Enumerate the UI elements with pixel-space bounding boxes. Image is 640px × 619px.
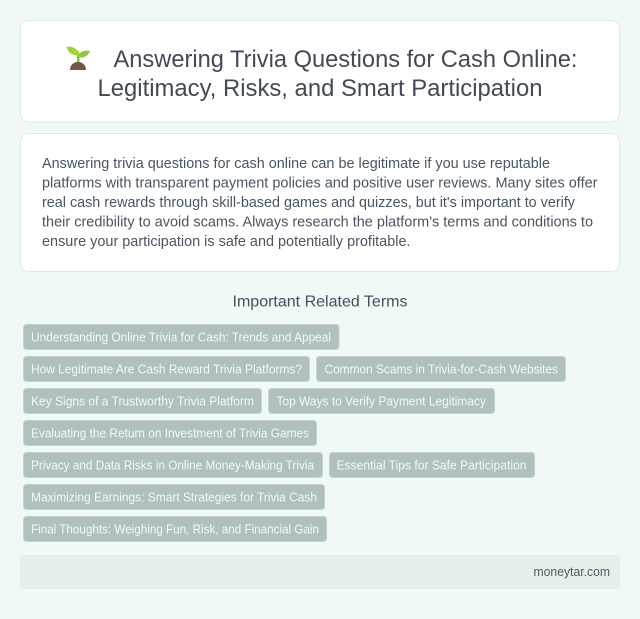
panel: introduction bbox=[20, 134, 620, 272]
tag: Privacy and Data Risks in Online Money-Making Trivia bbox=[31, 458, 315, 472]
tag bbox=[24, 484, 324, 510]
footer bbox=[20, 555, 620, 589]
tag bbox=[316, 356, 566, 382]
intro paragraph: ensure your participation is safe and potentially profitable. bbox=[42, 234, 410, 250]
title: Legitimacy, Risks, and Smart Participation bbox=[98, 75, 542, 102]
tag bbox=[24, 356, 310, 382]
intro paragraph bbox=[42, 156, 598, 250]
panel: related term tags bbox=[24, 324, 566, 542]
tag bbox=[24, 324, 339, 350]
tag bbox=[330, 452, 534, 478]
title: Answering Trivia Questions for Cash Online: bbox=[114, 46, 578, 73]
tag: How Legitimate Are Cash Reward Trivia Platforms? bbox=[31, 362, 302, 376]
tag bbox=[24, 420, 316, 446]
title bbox=[98, 46, 578, 102]
tag bbox=[268, 388, 494, 414]
tag: Final Thoughts: Weighing Fun, Risk, and Financial Gain bbox=[31, 522, 319, 536]
footer site name: moneytar.com bbox=[534, 564, 610, 579]
tag bbox=[24, 516, 326, 542]
tag bbox=[24, 388, 262, 414]
panel: title card bbox=[20, 20, 620, 122]
intro paragraph: real cash rewards through skill-based games and quizzes, but it's important to verify bbox=[42, 195, 576, 211]
intro paragraph: Answering trivia questions for cash online can be legitimate if you use reputable bbox=[42, 156, 550, 172]
tag: Understanding Online Trivia for Cash: Trends and Appeal bbox=[31, 330, 331, 344]
heading: important related terms: Important Related Terms bbox=[232, 294, 408, 310]
tag: Maximizing Earnings: Smart Strategies for Trivia Cash bbox=[31, 490, 317, 504]
tag bbox=[24, 452, 322, 478]
tag: Common Scams in Trivia-for-Cash Websites bbox=[324, 362, 558, 376]
intro paragraph: platforms with transparent payment policies and positive user reviews. Many sites offer bbox=[42, 176, 598, 192]
tag: Top Ways to Verify Payment Legitimacy bbox=[276, 394, 486, 408]
icon: sprout bbox=[66, 46, 90, 70]
intro paragraph: their credibility to avoid scams. Always research the platform's terms and conditions to bbox=[42, 214, 593, 230]
tag: Essential Tips for Safe Participation bbox=[336, 458, 526, 472]
tag: Key Signs of a Trustworthy Trivia Platform bbox=[31, 394, 254, 408]
tag: Evaluating the Return on Investment of Trivia Games bbox=[31, 426, 309, 440]
